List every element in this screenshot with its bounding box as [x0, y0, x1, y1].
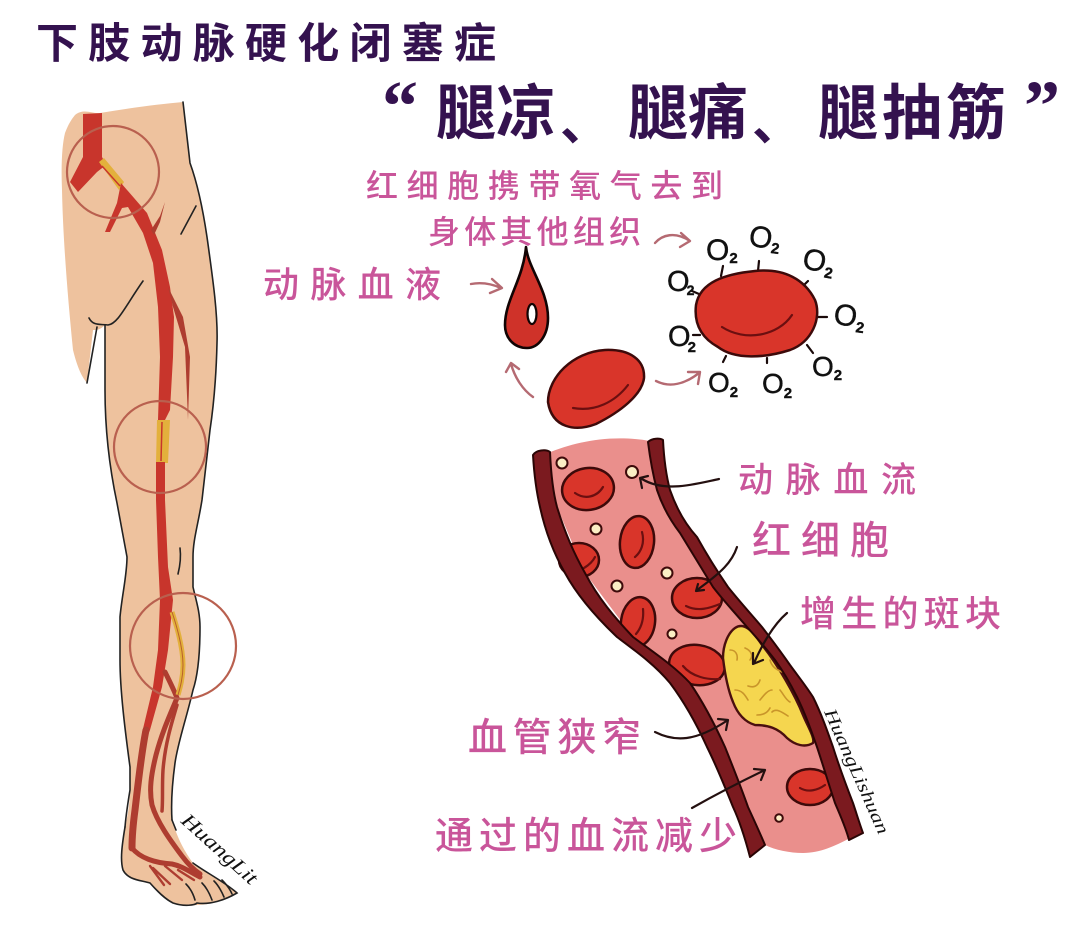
arrow to oxygenated cell — [655, 233, 690, 247]
arrow from cell to oxygenated cell — [656, 372, 700, 384]
arrow to cell — [696, 547, 737, 591]
oxygenated red blood cell — [667, 220, 868, 402]
subtitle: leg cold, leg pain, leg cramps: 腿抽筋 — [818, 80, 1006, 147]
left wall — [533, 450, 765, 857]
caption: red cells carry oxygen to other tissues: 身体其他组织 — [428, 214, 641, 250]
oxygen labels: 2 — [729, 250, 738, 267]
arrow to drop — [471, 279, 502, 293]
oxygen labels — [667, 220, 868, 402]
oxygen labels: O — [800, 243, 829, 279]
oxygen labels: 2 — [834, 367, 842, 384]
blood cells in vessel — [559, 465, 833, 805]
subtitle: leg cold, leg pain, leg cramps: 、 — [752, 95, 802, 151]
arrow to flow — [640, 476, 719, 488]
arrow to reduced flow — [692, 769, 765, 808]
subtitle: leg cold, leg pain, leg cramps: 腿痛 — [628, 80, 748, 147]
vessel lumen — [548, 438, 850, 853]
label: arterial flow: 动脉血流 — [738, 461, 916, 500]
plaque — [723, 626, 813, 745]
circled lesions — [67, 126, 236, 699]
icon: blood drop — [505, 247, 548, 348]
oxygen labels: O — [762, 368, 784, 399]
platelets — [556, 458, 783, 822]
arteries — [70, 113, 200, 885]
artery cross-section — [533, 438, 894, 857]
oxygen labels: 2 — [687, 282, 695, 298]
caption: red cells carry oxygen to other tissues — [366, 168, 723, 250]
oxygen labels: O — [708, 367, 730, 398]
oxygen labels: O — [668, 321, 691, 353]
right wall — [648, 439, 863, 840]
oxygen labels: O — [812, 351, 834, 382]
subtitle: leg cold, leg pain, leg cramps: “ — [382, 66, 418, 146]
oxygen labels: O — [747, 220, 775, 256]
arrow to plaque — [753, 613, 787, 664]
leg outlines — [87, 102, 237, 905]
label: arterial blood: 动脉血液 — [263, 264, 441, 305]
oxygen labels: O — [667, 266, 690, 298]
oxygen labels: 2 — [730, 384, 738, 401]
caption: red cells carry oxygen to other tissues: 红细胞携带氧气去到 — [366, 168, 723, 204]
subtitle: leg cold, leg pain, leg cramps: 、 — [560, 95, 610, 151]
oxygen labels: 2 — [770, 240, 780, 258]
signature: HuangLit — [176, 809, 262, 890]
subtitle: leg cold, leg pain, leg cramps: 腿凉 — [436, 80, 556, 147]
label: reduced flow: 通过的血流减少 — [435, 816, 737, 858]
arrow to narrowing — [655, 719, 728, 738]
label: narrowing: 血管狭窄 — [468, 717, 641, 760]
subtitle: leg cold, leg pain, leg cramps — [382, 66, 1060, 151]
label: red blood cell: 红细胞 — [752, 520, 889, 563]
label: plaque growth: 增生的斑块 — [800, 593, 1001, 634]
oxygen labels: 2 — [688, 339, 696, 356]
leg skin — [62, 102, 237, 906]
arrow from cell to drop — [506, 363, 533, 397]
oxygen labels: 2 — [823, 264, 834, 283]
oxygen ticks — [692, 261, 827, 363]
oxygen labels: 2 — [784, 385, 792, 402]
oxygen labels: O — [832, 298, 859, 334]
oxygen labels: O — [706, 234, 729, 267]
red blood cell — [548, 350, 644, 428]
subtitle: leg cold, leg pain, leg cramps: ” — [1024, 66, 1060, 146]
signature: HuangLishuan — [820, 704, 894, 837]
title: 下肢动脉硬化闭塞症 — [36, 20, 496, 67]
oxygen labels: 2 — [855, 319, 865, 337]
leg illustration — [62, 102, 262, 906]
